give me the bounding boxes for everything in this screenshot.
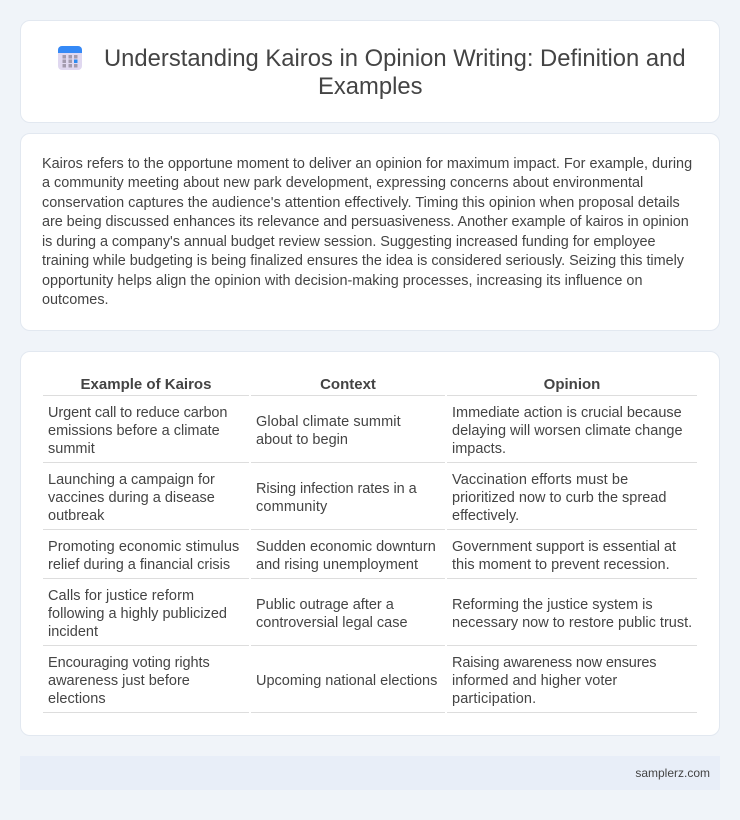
intro paragraph: outcomes. xyxy=(42,292,109,308)
intro paragraph: Kairos refers to the opportune moment to deliver an opinion for maximum impact. For example, during xyxy=(42,156,692,172)
table row 5 xyxy=(43,655,697,713)
table row 5: elections xyxy=(48,691,106,707)
intro paragraph: training while budgeting is being finalized ensures the idea is considered seriously. Seizing this timely xyxy=(42,253,684,269)
table row 5: Raising awareness now ensures xyxy=(452,655,656,671)
table row 5: awareness just before xyxy=(48,673,190,689)
table row 5: Encouraging voting rights xyxy=(48,655,210,671)
table row 3: Promoting economic stimulus xyxy=(48,539,239,555)
intro paragraph: is during a company's annual budget review session. Suggesting increased funding for employee xyxy=(42,234,655,250)
table row 2: vaccines during a disease xyxy=(48,490,215,506)
title: Understanding Kairos in Opinion Writing: Definition and xyxy=(104,45,686,72)
table row 2: Vaccination efforts must be xyxy=(452,472,628,488)
table row 3: and rising unemployment xyxy=(256,557,418,573)
header card xyxy=(20,20,720,123)
table row 4: Public outrage after a xyxy=(256,597,394,613)
intro card xyxy=(20,133,720,331)
table card xyxy=(20,351,720,736)
intro paragraph: a community meeting about new park development, expressing concerns about environmental xyxy=(42,175,643,191)
table row 2: prioritized now to curb the spread xyxy=(452,490,666,506)
table row 4: incident xyxy=(48,624,98,640)
column heading: example: Example of Kairos xyxy=(81,376,211,393)
table row 3: Sudden economic downturn xyxy=(256,539,436,555)
table row 1: about to begin xyxy=(256,432,348,448)
intro paragraph: opportunity helps align the opinion with decision-making processes, increasing its influence on xyxy=(42,273,642,289)
intro paragraph: conservation captures the audience's attention effectively. Timing this opinion when proposal details xyxy=(42,195,680,211)
footer source text: samplerz.com xyxy=(635,766,710,780)
column heading: context: Context xyxy=(320,376,376,393)
table row 1: impacts. xyxy=(452,441,506,457)
table row 2: community xyxy=(256,499,327,515)
table row 1: delaying will worsen climate change xyxy=(452,423,683,439)
table row 1: emissions before a climate xyxy=(48,423,220,439)
table row 4: Calls for justice reform xyxy=(48,588,194,604)
table row 1: summit xyxy=(48,441,95,457)
table row 2: Rising infection rates in a xyxy=(256,481,417,497)
table row 2 xyxy=(43,472,697,530)
table row 2: outbreak xyxy=(48,508,104,524)
table row 4: following a highly publicized xyxy=(48,606,227,622)
table row 5: participation. xyxy=(452,691,536,707)
table row 1: Urgent call to reduce carbon xyxy=(48,405,227,421)
table row 3: Government support is essential at xyxy=(452,539,676,555)
column heading: opinion: Opinion xyxy=(544,376,600,393)
table row 2: Launching a campaign for xyxy=(48,472,215,488)
table row 4 xyxy=(43,588,697,646)
table row 1: Global climate summit xyxy=(256,414,401,430)
icon: calendar xyxy=(58,46,82,70)
table header xyxy=(43,376,697,396)
table row 4: controversial legal case xyxy=(256,615,408,631)
table row 3 xyxy=(43,539,697,579)
table row 3: relief during a financial crisis xyxy=(48,557,230,573)
table row 1 xyxy=(43,405,697,463)
table row 1: Immediate action is crucial because xyxy=(452,405,682,421)
table row 3: this moment to prevent recession. xyxy=(452,557,670,573)
table row 5: Upcoming national elections xyxy=(256,673,437,689)
intro paragraph xyxy=(42,156,692,308)
table row 5: informed and higher voter xyxy=(452,673,617,689)
table row 2: effectively. xyxy=(452,508,519,524)
table row 4: Reforming the justice system is xyxy=(452,597,653,613)
title xyxy=(104,45,686,100)
title: Examples xyxy=(318,73,422,100)
table row 4: necessary now to restore public trust. xyxy=(452,615,692,631)
intro paragraph: are being discussed enhances its relevance and persuasiveness. Another example of kairos in opinion xyxy=(42,214,689,230)
footer bar xyxy=(20,756,720,790)
